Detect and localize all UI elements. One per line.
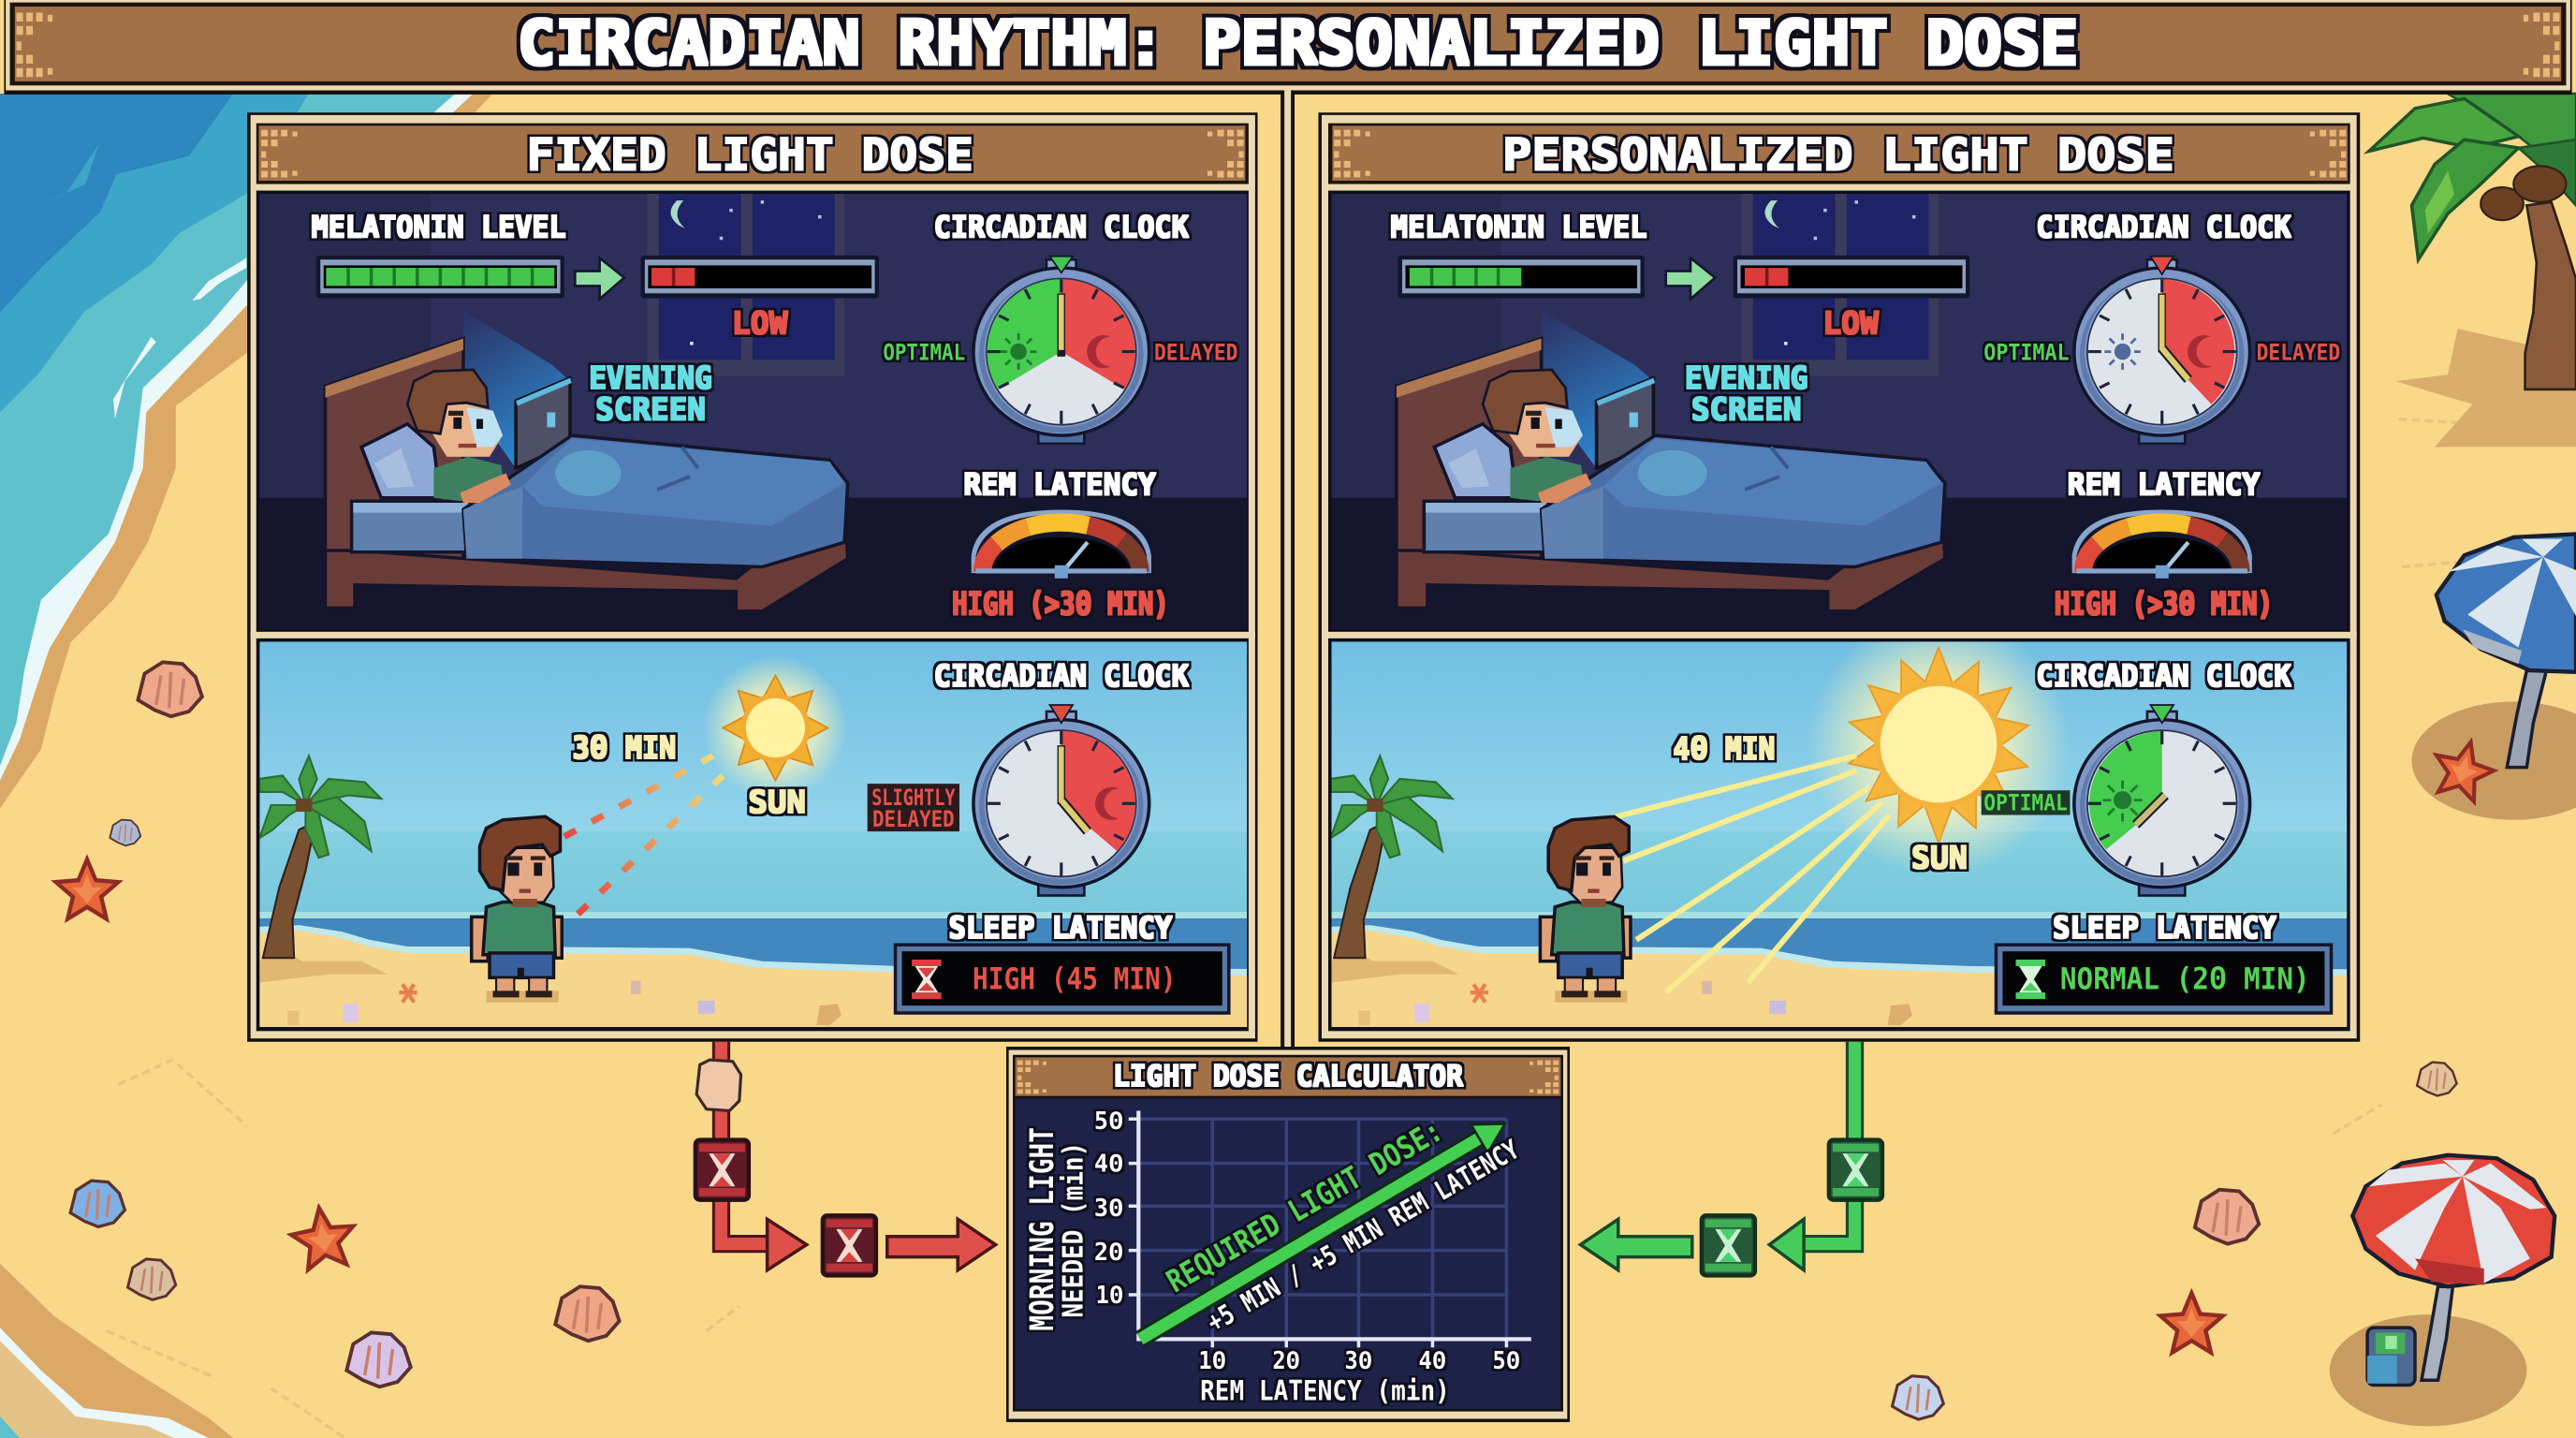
melatonin bar: low	[1734, 256, 1969, 299]
flow: red path from fixed panel to calculator	[694, 1042, 996, 1278]
label: evening screen: SCREEN	[595, 390, 706, 427]
strong light rays	[1603, 756, 1889, 992]
night scene: personalized	[1328, 191, 2350, 632]
title text: CIRCADIAN RHYTHM: PERSONALIZED LIGHT DOSE	[518, 8, 2078, 79]
label: light dose 40 min: 40 MIN	[1674, 730, 1775, 770]
palm tree, top right	[2369, 94, 2576, 447]
night scene: fixed	[256, 191, 1249, 632]
chart: required light dose	[1023, 1107, 1531, 1406]
icon: red hourglass	[912, 960, 942, 999]
arrow: melatonin falls	[575, 258, 624, 299]
x axis tick labels: 30	[1345, 1346, 1372, 1377]
centre divider	[1281, 91, 1295, 1050]
flow: green path from personalized panel to calculator	[1580, 1042, 1884, 1278]
y axis tick labels: 20	[1094, 1238, 1123, 1269]
panel heading: PERSONALIZED LIGHT DOSE	[1502, 130, 2174, 182]
starfish under blue umbrella	[2427, 734, 2499, 804]
label: melatonin level: MELATONIN LEVEL	[312, 210, 566, 245]
y axis title: NEEDED (min)	[1058, 1142, 1090, 1318]
arrow: dose trend line	[1140, 1123, 1505, 1339]
label: light dose 30 min: 30 MIN	[573, 729, 676, 770]
calculator heading: LIGHT DOSE CALCULATOR	[1113, 1060, 1463, 1093]
window with moon	[648, 194, 844, 376]
label: circadian clock: CIRCADIAN CLOCK	[934, 658, 1189, 694]
clock: optimal	[2072, 705, 2251, 896]
bed with person using a laptop	[1397, 311, 1945, 611]
label: evening screen	[1685, 360, 1808, 427]
value: high rem latency: HIGH (>30 MIN)	[952, 585, 1169, 625]
value: high rem latency: HIGH (>30 MIN)	[2055, 585, 2273, 625]
icon: hourglass, green	[1827, 1137, 1884, 1202]
label: slightly delayed: DELAYED	[872, 806, 955, 832]
label: rem latency: REM LATENCY	[2068, 466, 2261, 502]
y axis tick labels: 50	[1094, 1107, 1123, 1137]
beach umbrella: red and white with bag	[2330, 1155, 2554, 1426]
label: low: LOW	[732, 304, 788, 341]
gauge: rem latency	[970, 507, 1153, 579]
x axis tick labels: 20	[1272, 1346, 1300, 1377]
panel: personalized light dose	[1318, 112, 2382, 1042]
annotation: required light dose: REQUIRED LIGHT DOSE:	[1160, 1112, 1449, 1299]
panel: light dose calculator	[1006, 1047, 1570, 1422]
x axis title: REM LATENCY (min)	[1200, 1374, 1450, 1406]
icon: hourglass, red	[694, 1137, 751, 1202]
person on the beach	[472, 816, 562, 1003]
ocean and shoreline, upper left	[0, 94, 493, 809]
x axis tick labels: 40	[1419, 1346, 1446, 1377]
melatonin bar: low	[640, 256, 879, 299]
melatonin bar: half	[1398, 256, 1645, 299]
label: low: LOW	[1822, 304, 1880, 341]
label: slightly delayed	[868, 784, 959, 832]
melatonin bar: full	[316, 256, 564, 299]
clock: delayed zone	[2072, 257, 2251, 444]
label: melatonin level: MELATONIN LEVEL	[1391, 210, 1647, 245]
label: sleep latency: SLEEP LATENCY	[2053, 910, 2276, 946]
label: circadian clock: CIRCADIAN CLOCK	[2036, 658, 2291, 694]
label: optimal: OPTIMAL	[883, 339, 965, 365]
decorative shells and starfish on the sand	[56, 662, 2457, 1419]
sun: weak	[703, 655, 848, 800]
label: sun: SUN	[1911, 840, 1968, 876]
y axis tick labels	[1094, 1107, 1123, 1312]
status box: normal 20 min	[1995, 943, 2333, 1015]
clock: optimal and delayed zones	[972, 257, 1150, 444]
label: rem latency: REM LATENCY	[963, 466, 1156, 502]
arrow: green into calculator	[1580, 1219, 1692, 1270]
label: circadian clock: CIRCADIAN CLOCK	[2036, 210, 2291, 245]
label: sleep latency: SLEEP LATENCY	[949, 910, 1173, 946]
panel: fixed light dose	[247, 112, 1311, 1042]
person on the beach	[1540, 816, 1631, 1003]
clock: slightly delayed	[972, 705, 1150, 896]
y axis title: MORNING LIGHT	[1023, 1127, 1061, 1331]
arrow: red into calculator	[887, 1219, 996, 1270]
panel heading: FIXED LIGHT DOSE	[527, 130, 973, 182]
label: evening screen	[589, 360, 712, 427]
y axis tick labels: 10	[1096, 1281, 1123, 1312]
day scene: personalized	[1322, 613, 2382, 1031]
sand ripples	[107, 419, 2497, 1438]
annotation: rule of thumb: +5 MIN / +5 MIN REM LATENCY	[1202, 1134, 1525, 1338]
label: delayed: DELAYED	[2257, 339, 2340, 365]
icon: hourglass, green	[1700, 1213, 1757, 1278]
label: optimal: OPTIMAL	[1983, 339, 2070, 365]
x axis tick labels: 50	[1493, 1346, 1520, 1377]
label: evening screen: SCREEN	[1691, 390, 1801, 427]
label: delayed: DELAYED	[1154, 339, 1237, 365]
y axis tick labels: 30	[1094, 1194, 1123, 1225]
icon: hourglass, red	[821, 1213, 878, 1278]
label: sun: SUN	[748, 784, 806, 820]
day scene: fixed	[251, 631, 1311, 1031]
window with moon	[1741, 194, 1939, 376]
label: evening screen: EVENING	[1685, 360, 1808, 396]
status box: high 45 min	[894, 943, 1231, 1015]
value text: NORMAL (20 MIN)	[2060, 961, 2310, 1000]
gauge: rem latency	[2070, 507, 2254, 579]
icon: fist	[696, 1060, 741, 1110]
title banner	[4, 0, 2572, 95]
sun: strong	[1813, 641, 2065, 867]
label: optimal: OPTIMAL	[1983, 789, 2068, 815]
dashed light rays	[562, 756, 723, 917]
y axis title	[1023, 1127, 1090, 1331]
bed with person using a laptop	[326, 311, 848, 611]
label: slightly delayed: SLIGHTLY	[871, 785, 956, 811]
arrow: melatonin falls	[1666, 258, 1715, 299]
label: evening screen: EVENING	[589, 360, 712, 396]
label: circadian clock: CIRCADIAN CLOCK	[934, 210, 1189, 245]
y axis tick labels: 40	[1094, 1149, 1123, 1180]
shoreline, lower left corner	[0, 1264, 233, 1438]
value text: HIGH (45 MIN)	[973, 961, 1177, 997]
x axis tick labels: 10	[1198, 1346, 1226, 1377]
beach umbrella: blue and white	[2411, 534, 2576, 820]
icon: green hourglass	[2016, 960, 2045, 999]
x axis tick labels	[1198, 1346, 1520, 1377]
